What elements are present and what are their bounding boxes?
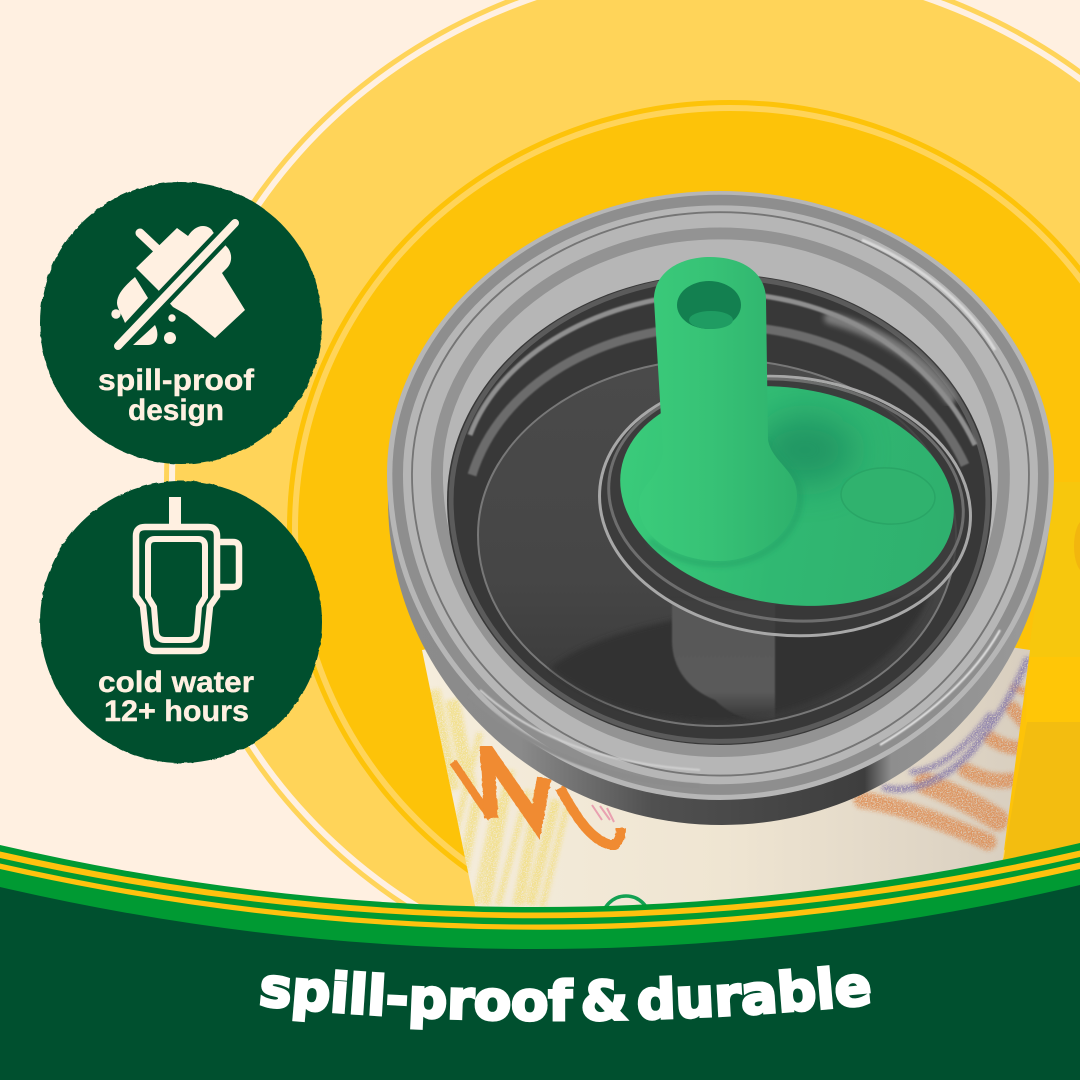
- pink crayon marks: [592, 805, 614, 822]
- badge label: [98, 364, 255, 427]
- orange crayon hatch: [862, 688, 1026, 842]
- lid: dark lower band: [388, 500, 1050, 825]
- tumbler body with crayon drawing: [422, 648, 1030, 907]
- disc shadow: [755, 416, 855, 484]
- purple crayon loop: [885, 660, 1027, 789]
- green straw: [639, 257, 797, 561]
- badge: spill-proof design: [40, 182, 322, 464]
- orange scribble: [453, 751, 621, 845]
- badge label: [98, 666, 254, 728]
- icon: tumbler with straw and handle: [136, 497, 239, 651]
- disc button: [840, 466, 936, 526]
- badge label: cold water: [98, 666, 254, 699]
- badge label: spill-proof: [98, 364, 255, 397]
- badge: cold water 12+ hours: [40, 481, 322, 763]
- green silicone disc: [604, 363, 970, 629]
- bottom wave banner: [0, 843, 1080, 1080]
- tumbler handle, yellow, right side: [1000, 482, 1080, 880]
- cup wall: [422, 600, 1030, 920]
- lid: inner opening: [447, 274, 992, 745]
- yellow crayon lines: [433, 690, 567, 907]
- inner floor: [478, 359, 956, 726]
- background disc: pale yellow with double outline: [164, 0, 1080, 1003]
- background disc: deep yellow with double outline: [287, 100, 1080, 956]
- flare shadow on disc: [650, 440, 800, 564]
- straw hole: [677, 281, 741, 329]
- rim highlights: [880, 630, 1000, 745]
- upper stripes inside opening: [470, 293, 975, 445]
- floor shadow: [550, 595, 930, 720]
- green logo arc: [602, 896, 650, 944]
- badge label: 12+ hours: [104, 695, 249, 728]
- straw underside seen through lid: [672, 600, 775, 722]
- straw shaft and base flare: [639, 257, 797, 561]
- banner heading: spill-proof & durable: [260, 965, 871, 1030]
- lid: clear outer rim: [387, 191, 1054, 800]
- clear gasket ring around disc: [587, 358, 983, 654]
- badge label: design: [128, 394, 224, 427]
- icon: spilled cup crossed out: [111, 223, 245, 346]
